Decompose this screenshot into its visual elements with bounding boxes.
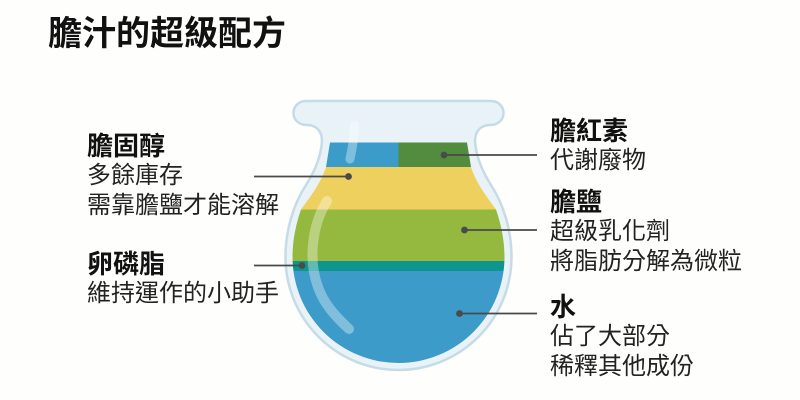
layer: water bbox=[285, 271, 510, 366]
flask diagram bbox=[254, 100, 537, 372]
label: lecithin: 卵磷脂 bbox=[87, 249, 165, 279]
leader: bilirubin bbox=[441, 152, 537, 158]
layer: bile salts bbox=[285, 210, 510, 261]
leader: lecithin bbox=[254, 262, 305, 269]
label: bilirubin: 膽紅素 bbox=[550, 116, 628, 146]
label: water bbox=[550, 292, 694, 380]
label: water: 稀釋其他成份 bbox=[550, 353, 694, 380]
label: cholesterol bbox=[87, 131, 279, 219]
label: cholesterol: 膽固醇 bbox=[87, 131, 165, 161]
label: bile salts: 將脂肪分解為微粒 bbox=[550, 248, 742, 275]
glass highlights bbox=[312, 125, 354, 329]
label: bile salts: 膽鹽 bbox=[550, 187, 602, 217]
layer: lecithin bbox=[285, 261, 510, 271]
label: water: 水 bbox=[550, 292, 576, 322]
leader: bile salts bbox=[461, 227, 537, 233]
label: cholesterol: 多餘庫存 bbox=[87, 162, 183, 189]
label: bilirubin: 代謝廢物 bbox=[550, 147, 646, 174]
layer: bilirubin bbox=[398, 142, 471, 167]
layer: water top left bbox=[320, 142, 398, 167]
flask glass bbox=[286, 101, 512, 370]
label: lecithin: 維持運作的小助手 bbox=[87, 280, 279, 307]
leader: water bbox=[456, 310, 537, 317]
label: cholesterol: 需靠膽鹽才能溶解 bbox=[87, 192, 279, 219]
leader lines bbox=[254, 152, 537, 317]
layer: cholesterol bbox=[301, 167, 496, 210]
label: lecithin bbox=[87, 249, 279, 307]
label: bilirubin bbox=[550, 116, 646, 174]
label: bile salts: 超級乳化劑 bbox=[550, 218, 670, 245]
title: 膽汁的超級配方 bbox=[48, 15, 286, 53]
label: bile salts bbox=[550, 187, 742, 275]
label: water: 佔了大部分 bbox=[550, 323, 670, 350]
leader: cholesterol bbox=[254, 173, 352, 180]
liquid layers bbox=[285, 142, 510, 366]
